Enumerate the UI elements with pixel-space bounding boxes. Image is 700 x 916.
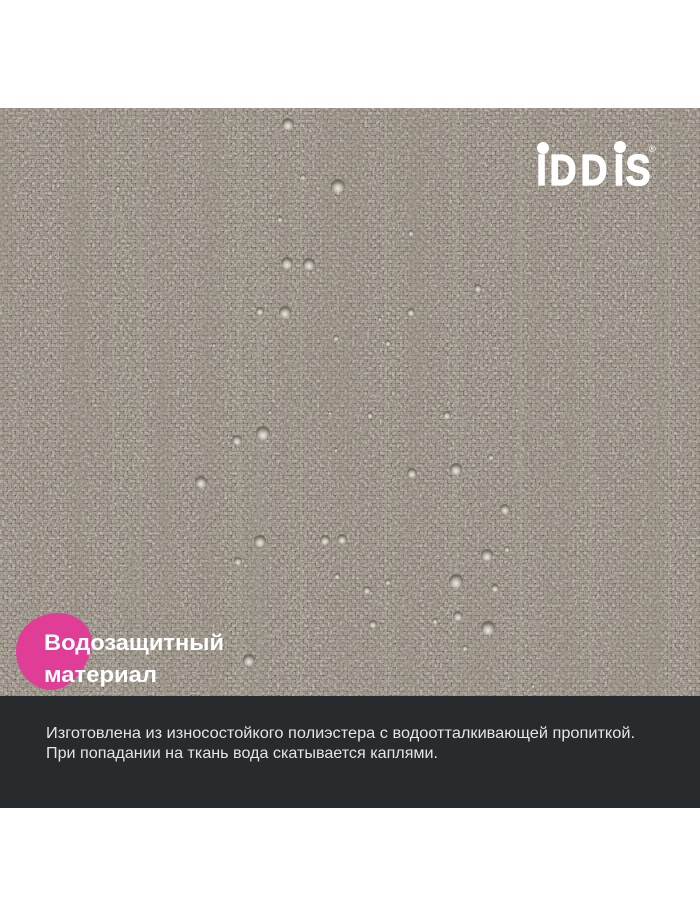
description text: При попадании на ткань вода скатывается каплями. bbox=[46, 745, 438, 762]
logo: IDDIS: IDDIS bbox=[536, 145, 651, 195]
heading: waterproof material bbox=[44, 630, 224, 687]
logo: IDDIS: ® bbox=[649, 144, 656, 154]
heading: waterproof material: Водозащитный bbox=[44, 630, 224, 655]
description text bbox=[46, 725, 635, 762]
pink circle accent bbox=[16, 613, 92, 690]
description text: Изготовлена из износостойкого полиэстера с водоотталкивающей пропиткой. bbox=[46, 725, 635, 742]
panel: fabric photo bbox=[0, 108, 700, 696]
heading: waterproof material: материал bbox=[44, 662, 157, 687]
water droplets bbox=[68, 118, 535, 688]
panel: dark description band bbox=[0, 696, 700, 808]
